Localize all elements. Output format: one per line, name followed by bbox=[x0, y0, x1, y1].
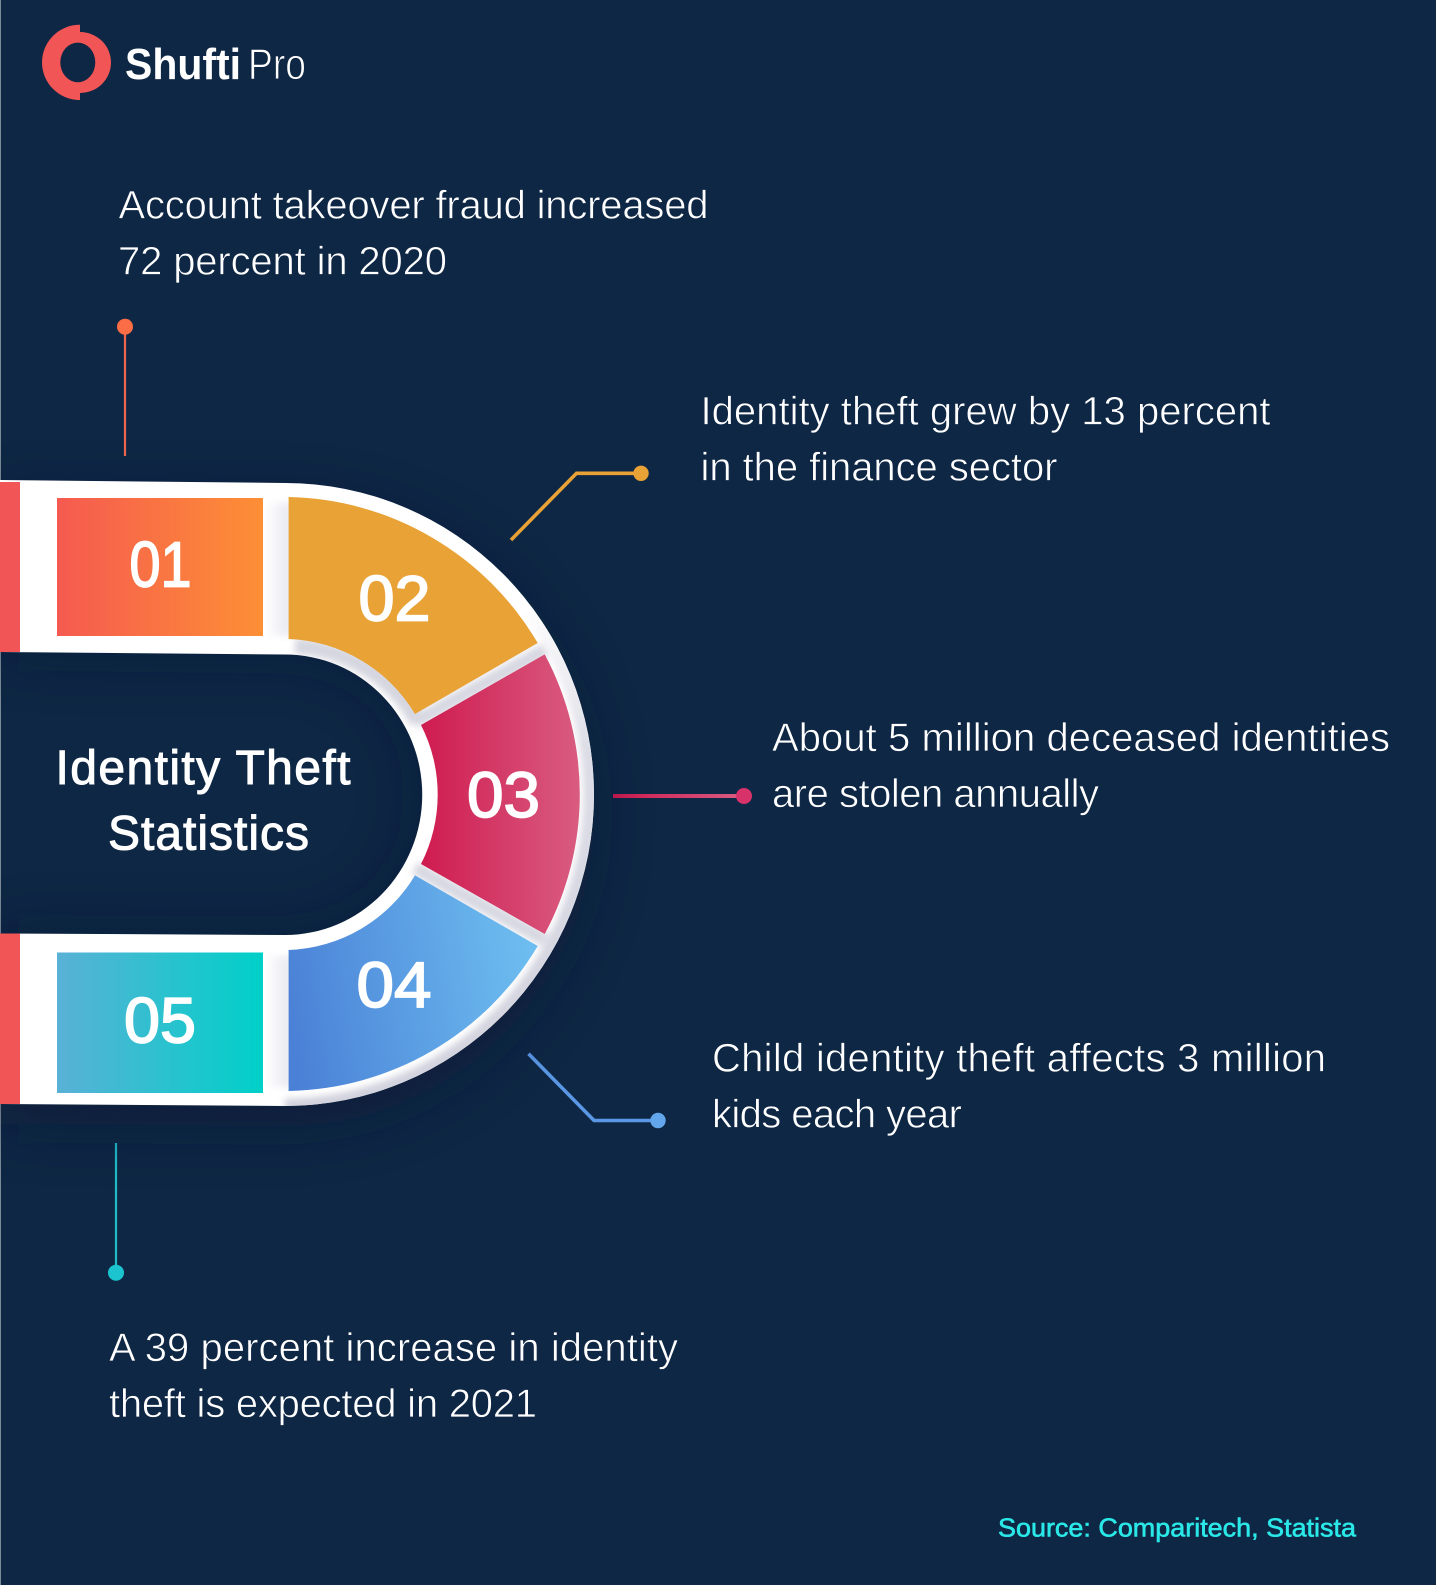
segment 02 bbox=[289, 497, 538, 714]
segment 05: 05 bbox=[124, 984, 196, 1056]
horseshoe diagram bbox=[0, 470, 600, 1115]
statistic 3 text bbox=[772, 716, 1390, 816]
segment 04 bbox=[289, 875, 538, 1091]
statistic 5 text: A 39 percent increase in identity bbox=[109, 1326, 678, 1370]
statistic 5 text bbox=[109, 1326, 678, 1426]
connector 3 bbox=[613, 788, 752, 804]
logo wordmark: Shufti bbox=[125, 40, 241, 89]
connector 1 bbox=[117, 319, 133, 456]
statistic 4 text bbox=[712, 1036, 1326, 1136]
segment 04: 04 bbox=[356, 949, 432, 1021]
statistic 1 text bbox=[118, 184, 708, 283]
logo wordmark bbox=[125, 40, 306, 89]
statistic 1 text: 72 percent in 2020 bbox=[118, 239, 447, 283]
statistic 1 text: Account takeover fraud increased bbox=[118, 184, 708, 228]
statistic 3 text: are stolen annually bbox=[772, 772, 1099, 816]
statistic 3 text: About 5 million deceased identities bbox=[772, 716, 1390, 760]
icon: logo ring bbox=[42, 25, 111, 100]
center title: Identity Theft bbox=[56, 742, 350, 795]
statistic 4 text: Child identity theft affects 3 million bbox=[712, 1036, 1326, 1080]
segment 01 bbox=[57, 498, 263, 636]
statistic 4 text: kids each year bbox=[712, 1092, 962, 1136]
white band bbox=[0, 470, 600, 1115]
logo: Shufti Pro bbox=[42, 25, 306, 100]
segment 01: 01 bbox=[130, 528, 192, 600]
connector 5 bbox=[108, 1143, 124, 1281]
statistic 2 text: in the finance sector bbox=[700, 445, 1058, 489]
center title: Statistics bbox=[108, 808, 309, 860]
statistic 2 text bbox=[700, 389, 1270, 489]
red strip bottom bbox=[0, 934, 20, 1104]
statistic 2 text: Identity theft grew by 13 percent bbox=[700, 389, 1270, 433]
connector 2 bbox=[511, 466, 649, 540]
shadow under horseshoe bbox=[0, 500, 594, 1126]
red strip top bbox=[0, 482, 20, 652]
source note: Source: Comparitech, Statista bbox=[998, 1512, 1357, 1542]
segment 05 bbox=[57, 952, 263, 1093]
segment 03: 03 bbox=[467, 759, 540, 831]
statistic 5 text: theft is expected in 2021 bbox=[109, 1382, 537, 1426]
connector 4 bbox=[528, 1054, 666, 1128]
logo wordmark: Pro bbox=[248, 40, 306, 89]
center title bbox=[56, 742, 350, 860]
segment 02: 02 bbox=[358, 562, 430, 634]
segment 03 bbox=[421, 654, 580, 934]
